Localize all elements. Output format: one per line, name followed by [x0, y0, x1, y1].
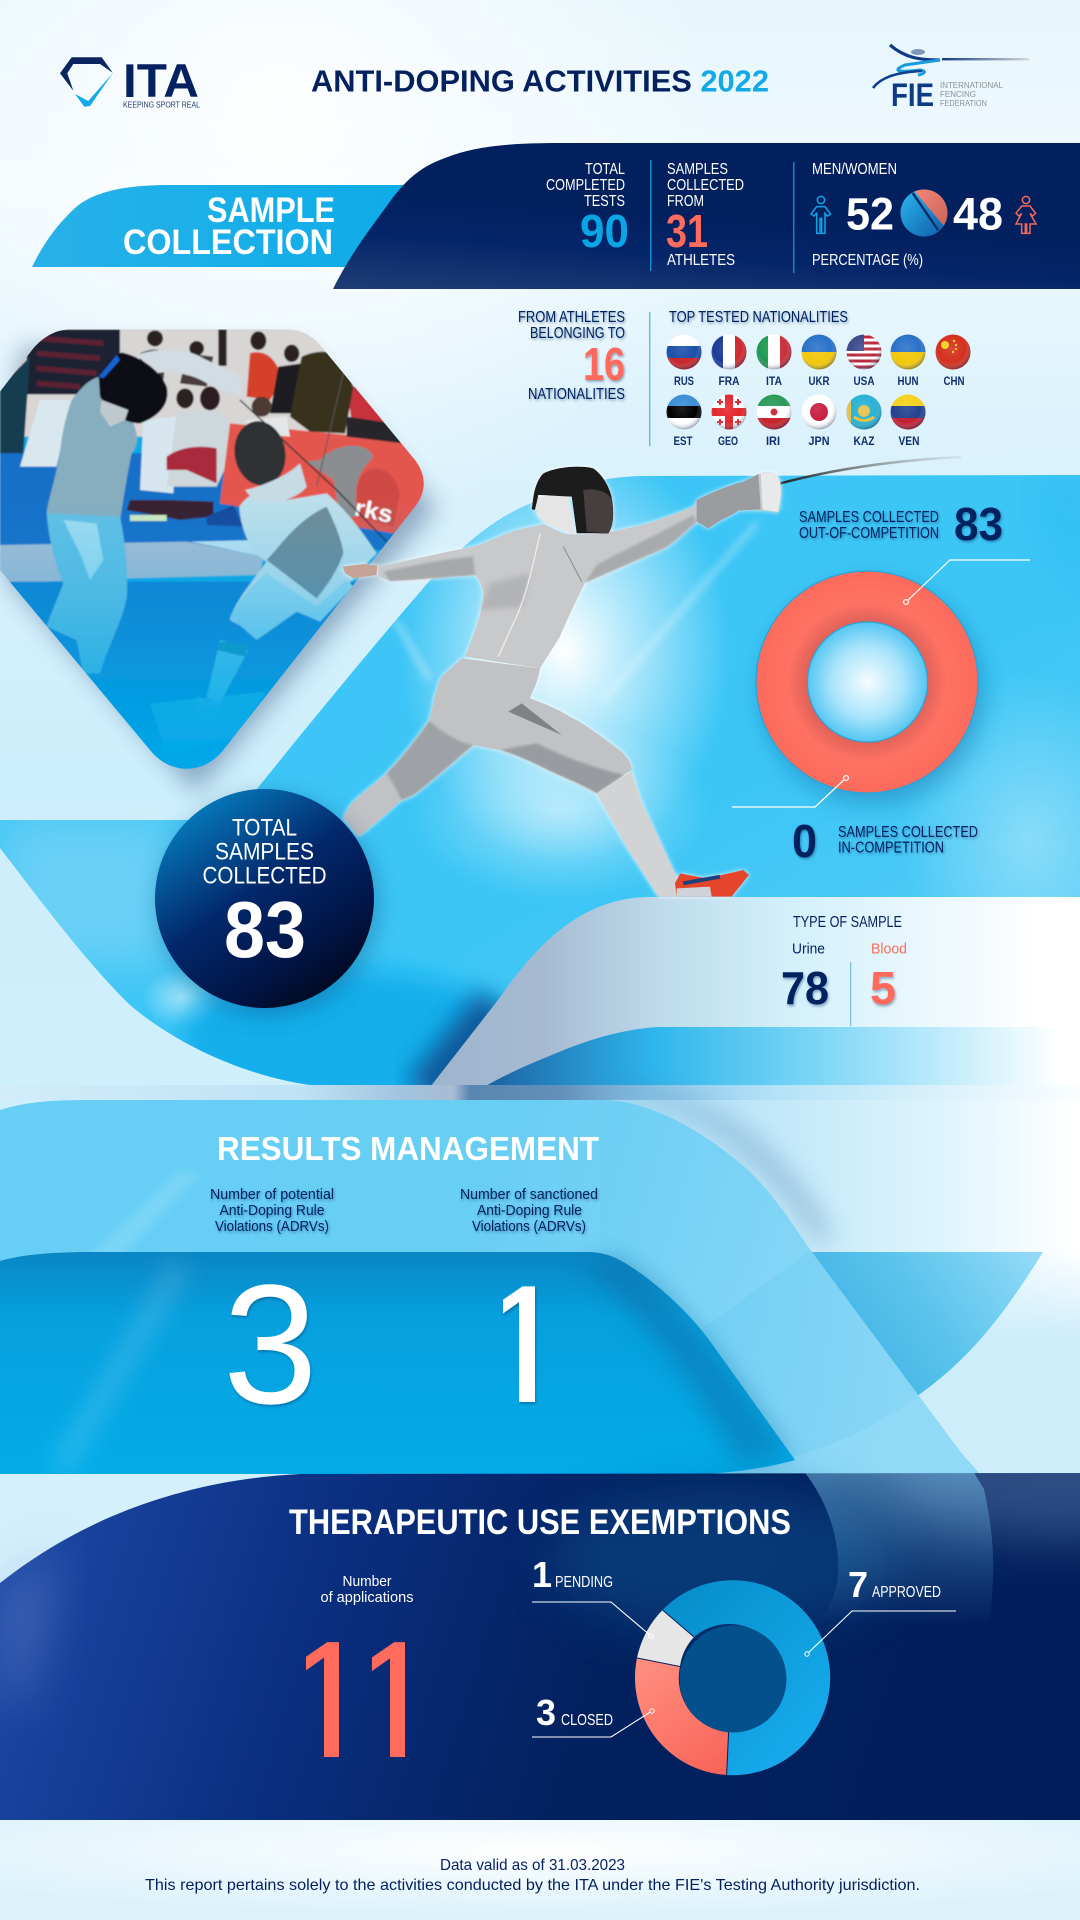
panel: results management text — [210, 1136, 600, 1408]
footer text: This report pertains solely to the activities conducted by the ITA under the FIE's Testing Authority jurisdiction. — [145, 1877, 920, 1894]
panel: results management ribbon — [0, 1086, 980, 1474]
panel: sample collection stats — [333, 143, 1080, 289]
logo: FIE: FEDERATION — [940, 98, 987, 108]
label: total samples collected: SAMPLES — [215, 838, 314, 866]
panel: sample collection heading tab — [32, 185, 420, 267]
stat: men and women percentage: MEN/WOMEN — [812, 161, 897, 178]
flag labels: FRA — [718, 376, 740, 388]
callout line: in-competition — [732, 778, 846, 807]
right fencer — [230, 492, 377, 637]
flag labels: GEO — [718, 436, 738, 448]
flag: FRA — [711, 334, 747, 370]
panel: event photo: rks — [352, 494, 395, 529]
callout: pending: 1 — [532, 1554, 552, 1595]
logo: FIE — [873, 45, 1029, 113]
label: total samples collected: TOTAL — [232, 814, 297, 842]
label: samples out-of-competition: SAMPLES COLLECTED — [799, 509, 939, 526]
label: potential ADRVs — [210, 1186, 334, 1235]
label: number of applications: Number — [342, 1573, 392, 1590]
flag labels: VEN — [898, 436, 920, 448]
flag: GEO — [711, 394, 747, 430]
panel: total samples collected circle — [155, 789, 377, 1014]
label: sanctioned ADRVs: Violations (ADRVs) — [472, 1218, 586, 1235]
number: 83: 83 — [224, 885, 306, 974]
callout line: out-of-competition — [906, 560, 1030, 602]
spectators — [167, 410, 233, 487]
chart: TUE donut — [532, 1554, 956, 1775]
number: 1 — [503, 1286, 537, 1405]
label: potential ADRVs: Anti-Doping Rule — [220, 1202, 324, 1219]
heading: sample collection: SAMPLE — [207, 191, 335, 230]
text: athletes nationalities: BELONGING TO — [530, 325, 625, 342]
stat: samples collected from athletes: COLLECTED — [667, 177, 744, 194]
floor wedge — [0, 542, 263, 583]
title: ANTI-DOPING ACTIVITIES 2022 — [311, 64, 769, 98]
flag labels: USA — [854, 376, 874, 388]
stat: samples collected from athletes — [666, 161, 744, 269]
panel: type of sample: Urine — [792, 940, 825, 958]
logo: ITA: KEEPING SPORT REAL — [123, 100, 200, 110]
panel: therapeutic use exemptions text — [289, 1509, 790, 1757]
flag: UKR — [801, 334, 837, 370]
header — [60, 45, 1029, 113]
callout: approved: 7 — [848, 1564, 868, 1605]
flag labels: CHN — [944, 376, 964, 388]
label: total samples collected — [202, 814, 326, 890]
label: samples out-of-competition — [799, 498, 1003, 550]
stat: total completed tests: TOTAL — [585, 161, 625, 178]
flag: RUS — [666, 334, 702, 370]
decorative triangle swoosh — [500, 1252, 1043, 1473]
stat: total completed tests: 90 — [580, 205, 629, 257]
mask — [536, 495, 575, 535]
heading: sample collection — [123, 191, 335, 262]
footer text — [145, 1857, 920, 1894]
stat: total completed tests — [546, 161, 629, 257]
label: sanctioned ADRVs: Number of sanctioned — [460, 1186, 598, 1203]
text: athletes nationalities — [518, 309, 625, 403]
stat: samples collected from athletes: SAMPLES — [667, 161, 728, 178]
label: number of applications: of applications — [320, 1589, 414, 1606]
logo: ITA: ITA — [123, 54, 199, 107]
logo: FIE: FENCING — [940, 89, 976, 99]
illustration: fencer — [343, 457, 961, 897]
flag labels — [674, 376, 964, 448]
panel: therapeutic use exemptions background — [0, 1466, 1080, 1820]
label: sanctioned ADRVs — [460, 1186, 598, 1235]
stat: samples collected from athletes: ATHLETES — [667, 252, 735, 269]
text: athletes nationalities: NATIONALITIES — [528, 386, 625, 403]
panel: type of sample: Blood — [871, 940, 907, 958]
panel: pale right field — [600, 1086, 1080, 1476]
footer text: Data valid as of 31.03.2023 — [440, 1857, 625, 1874]
flag: CHN — [935, 334, 971, 370]
flag: ITA — [756, 334, 792, 370]
text: athletes nationalities: 16 — [583, 338, 625, 390]
heading: therapeutic use exemptions: THERAPEUTIC USE EXEMPTIONS — [289, 1503, 791, 1542]
flag labels: ITA — [766, 376, 782, 388]
panel: results management lower layer — [0, 1252, 795, 1474]
pie: men women split — [900, 190, 948, 236]
flag: IRI — [756, 394, 792, 430]
label: samples in-competition: SAMPLES COLLECTED — [838, 824, 978, 841]
stat: men and women percentage: PERCENTAGE (%) — [812, 252, 923, 269]
flag: USA — [846, 334, 882, 370]
panel: out-of-competition donut — [732, 560, 1030, 807]
callout: approved: APPROVED — [872, 1584, 941, 1601]
label: samples out-of-competition: 83 — [954, 498, 1003, 550]
callout: closed: CLOSED — [561, 1712, 613, 1729]
callout: pending: PENDING — [555, 1574, 613, 1591]
sock — [597, 772, 677, 897]
logo: ITA — [60, 54, 200, 110]
band below swoosh — [0, 1085, 1080, 1100]
label: potential ADRVs: Number of potential — [210, 1186, 334, 1203]
panel: type of sample — [781, 914, 907, 1026]
panel: type of sample background — [420, 897, 1080, 1100]
label: total samples collected: COLLECTED — [202, 862, 326, 890]
number: 3: 3 — [223, 1250, 318, 1440]
number: 11: 1 — [284, 1607, 377, 1793]
label: number of applications — [320, 1573, 414, 1606]
flag: HUN — [890, 334, 926, 370]
number: 1: 1 — [479, 1250, 572, 1438]
callout: closed: 3 — [536, 1692, 556, 1733]
hand — [343, 564, 377, 578]
callout: approved — [805, 1564, 956, 1656]
heading: top tested nationalities: TOP TESTED NATIONALITIES — [669, 309, 848, 326]
flag labels: JPN — [808, 436, 830, 448]
logo: FIE: FIE — [891, 77, 934, 113]
flag: VEN — [890, 394, 926, 430]
flag: EST — [666, 394, 702, 430]
stat: samples collected from athletes: 31 — [666, 205, 708, 257]
panel: type of sample: TYPE OF SAMPLE — [793, 914, 902, 931]
flag labels: EST — [674, 436, 692, 448]
stat: men and women percentage: 48 — [953, 188, 1003, 240]
stat: men and women percentage — [811, 161, 1036, 269]
callout: closed — [532, 1692, 654, 1737]
jacket — [378, 473, 781, 668]
panel: type of sample: 78 — [781, 962, 829, 1014]
label: potential ADRVs: Violations (ADRVs) — [215, 1218, 329, 1235]
number: 11 — [306, 1642, 405, 1757]
panel: top tested nationalities — [666, 309, 971, 448]
stat: men and women percentage: 52 — [846, 188, 894, 240]
flag labels: UKR — [808, 376, 830, 388]
panel: event photo — [0, 329, 445, 800]
shoe — [675, 870, 749, 897]
label: samples out-of-competition: OUT-OF-COMPETITION — [799, 525, 939, 542]
icon: woman — [1016, 196, 1036, 233]
panel: central blue swoosh background — [0, 435, 1080, 1110]
flag: JPN — [801, 394, 837, 430]
heading: results management: RESULTS MANAGEMENT — [217, 1130, 599, 1167]
text: athletes nationalities: FROM ATHLETES — [518, 309, 625, 326]
label: samples in-competition — [792, 815, 978, 867]
panel: footer background — [0, 1820, 1080, 1920]
heading: sample collection: COLLECTION — [123, 223, 333, 262]
callout: pending — [532, 1554, 653, 1638]
icon: man — [811, 196, 831, 233]
left fencer — [47, 377, 137, 673]
number: 11: 1 — [351, 1607, 444, 1793]
flag labels: HUN — [898, 376, 918, 388]
flag labels: RUS — [674, 376, 694, 388]
label: sanctioned ADRVs: Anti-Doping Rule — [477, 1202, 582, 1219]
flag labels: KAZ — [854, 436, 874, 448]
flag labels: IRI — [766, 436, 780, 448]
panel: type of sample: 5 — [870, 962, 896, 1014]
stat: samples collected from athletes: FROM — [667, 193, 704, 210]
pants — [343, 658, 632, 837]
stat: total completed tests: TESTS — [584, 193, 625, 210]
label: samples in-competition: 0 — [792, 815, 817, 867]
logo: FIE: INTERNATIONAL — [940, 80, 1003, 90]
flag: KAZ — [846, 394, 882, 430]
label: samples in-competition: IN-COMPETITION — [838, 840, 944, 856]
stat: total completed tests: COMPLETED — [546, 177, 625, 194]
